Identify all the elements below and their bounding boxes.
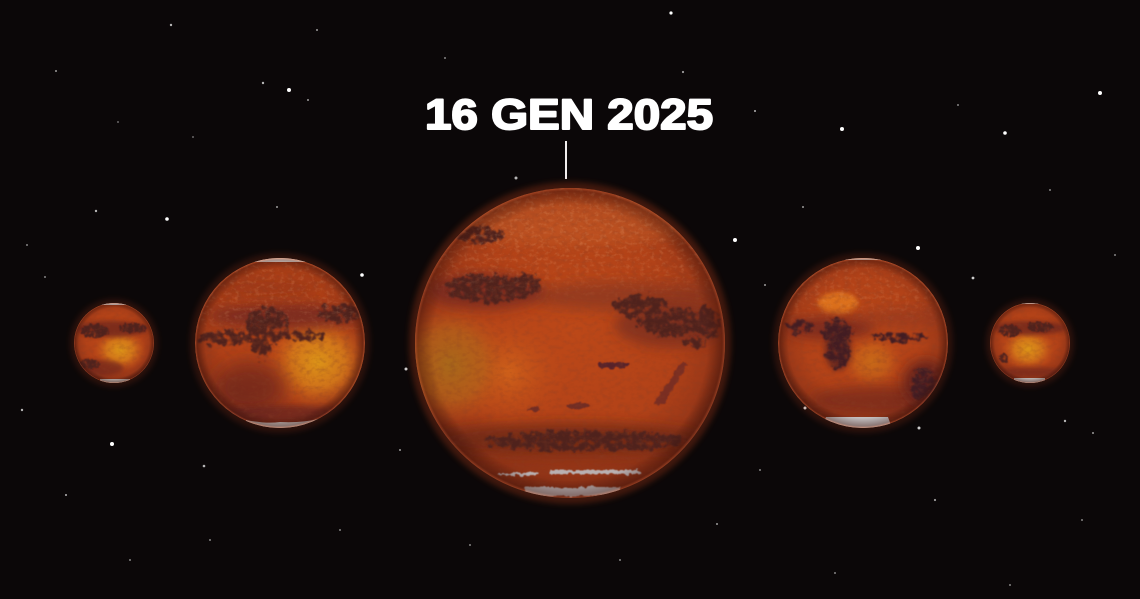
planet 5: small, far right bbox=[986, 299, 1074, 387]
planet 1: small, far left bbox=[70, 299, 158, 387]
planet 4: medium, right bbox=[773, 253, 953, 433]
planet 2: medium, left bbox=[190, 253, 372, 433]
pointer line to central planet bbox=[565, 141, 567, 179]
title: date: 16 GEN 2025 bbox=[425, 91, 713, 139]
planet 3: large, central bbox=[388, 182, 731, 504]
